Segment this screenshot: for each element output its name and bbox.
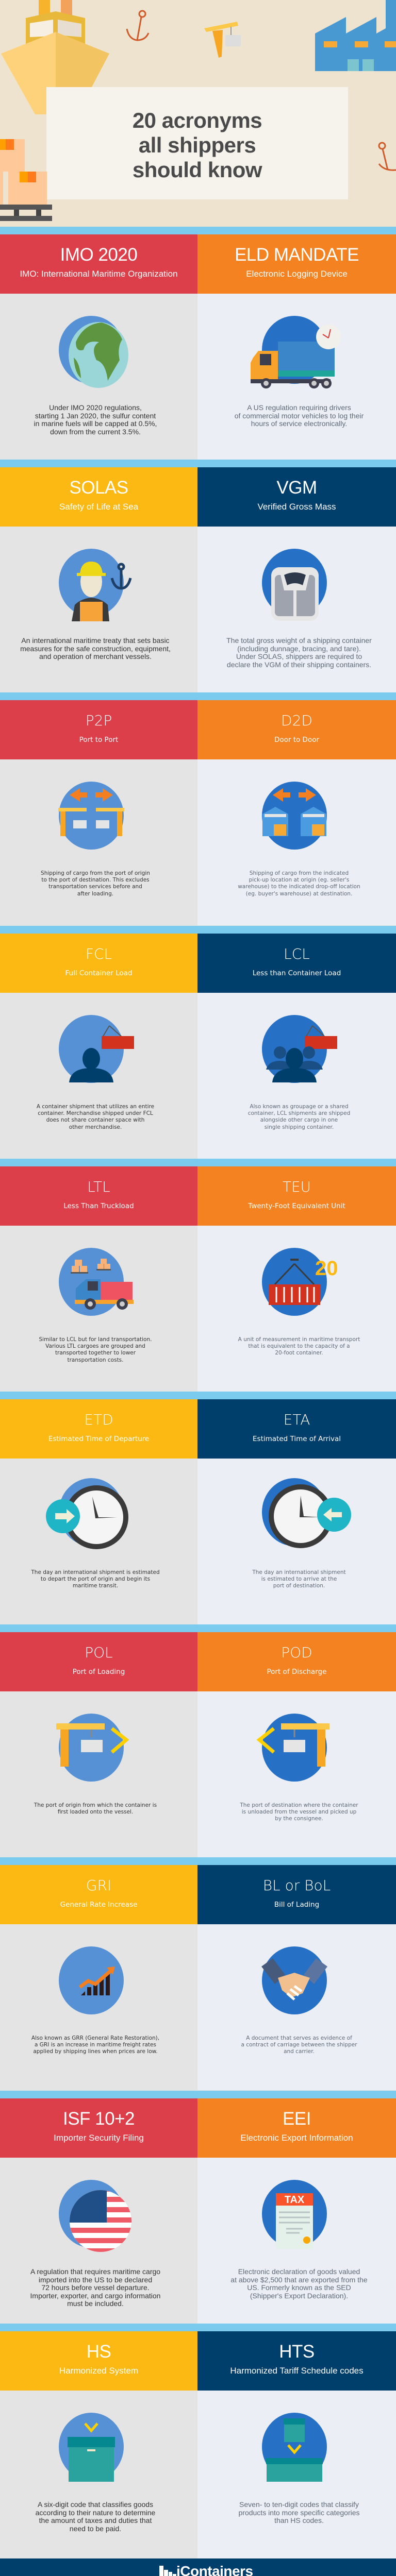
text: ISF description: imported into the US to be declared	[39, 2275, 152, 2283]
header: BL or BoL	[197, 1865, 396, 1924]
text: HTS description: products into more specific categories	[238, 2508, 360, 2516]
icon: people with container	[262, 1015, 337, 1083]
header: LTL: Less Than Truckload	[63, 1202, 134, 1210]
text: ETA description: The day an international shipment	[252, 1569, 346, 1575]
header: POL: POL	[85, 1644, 113, 1661]
text: HS description: according to their nature to determine	[36, 2508, 155, 2516]
row 9: ISF 10+2 / EEI	[0, 2091, 396, 2324]
text: ELD description: of commercial motor vehicles to log their	[235, 411, 364, 419]
header: P2P: Port to Port	[79, 736, 118, 744]
text: TEU description: A unit of measurement in maritime transport	[238, 1336, 360, 1343]
text: POD description: by the consignee.	[275, 1816, 323, 1822]
text: POD description	[240, 1802, 358, 1822]
header: LCL	[197, 934, 396, 993]
header: D2D	[197, 700, 396, 759]
text: ETA description: port of destination.	[273, 1583, 325, 1589]
text: POL description	[34, 1802, 157, 1815]
text: FCL description: other merchandise.	[69, 1124, 122, 1130]
header: POD	[197, 1632, 396, 1691]
hero illustration	[0, 0, 396, 227]
header: HTS: HTS	[279, 2342, 315, 2362]
text: HS description	[15, 2501, 175, 2533]
text: HS description: need to be paid.	[70, 2524, 121, 2533]
text: HS description: the amount of taxes and duties that	[39, 2516, 152, 2524]
header: EEI	[197, 2098, 396, 2158]
header: POD: POD	[281, 1644, 312, 1661]
header: EEI: Electronic Export Information	[240, 2133, 353, 2143]
row 4: FCL / LCL	[0, 926, 396, 1159]
header: ETA	[197, 1399, 396, 1459]
text: TEU description	[238, 1336, 360, 1356]
text: LCL description	[248, 1104, 350, 1130]
icon: tax document: TAX	[285, 2194, 305, 2206]
text: ELD description	[235, 403, 364, 428]
row 3: P2P / D2D	[0, 692, 396, 925]
header: FCL: FCL	[86, 945, 112, 962]
text: D2D description	[238, 870, 360, 897]
header: POL	[0, 1632, 197, 1691]
header: IMO 2020	[0, 234, 197, 294]
panel: ISF	[30, 2180, 160, 2306]
panel: VGM	[197, 527, 396, 692]
icon: person with container	[59, 1015, 134, 1083]
text: D2D description: Shipping of cargo from the indicated	[250, 870, 349, 876]
text: FCL description: container. Merchandise shipped under FCL	[38, 1110, 153, 1116]
header: ETD: Estimated Time of Departure	[48, 1435, 149, 1443]
icon: crane	[204, 22, 241, 58]
text: ISF description	[15, 2268, 175, 2308]
header: SOLAS: Safety of Life at Sea	[59, 502, 138, 512]
header: HTS	[197, 2331, 396, 2391]
header: BL or BoL: Bill of Lading	[274, 1901, 319, 1909]
icon: container with 20: 20	[315, 1257, 338, 1280]
header: P2P: P2P	[86, 712, 112, 729]
text: SOLAS description: measures for the safe construction, equipment,	[20, 644, 171, 652]
text: LTL description: transportation costs.	[67, 1357, 124, 1363]
panel: SOLAS	[0, 527, 197, 692]
header: VGM	[197, 467, 396, 527]
panel: ELD MANDATE	[197, 294, 396, 460]
text: ISF description: Importer, exporter, and cargo information	[30, 2292, 160, 2300]
text: ISF description: A regulation that requires maritime cargo	[30, 2267, 160, 2276]
boxes on pallet	[0, 139, 52, 221]
header: ETA: ETA	[284, 1411, 310, 1428]
text: ETD description: maritime transit.	[73, 1583, 118, 1589]
text: GRI description	[31, 2035, 159, 2055]
text: EEI description: at above $2,500 that are exported from the	[230, 2275, 368, 2283]
header: POL: Port of Loading	[73, 1668, 125, 1676]
panel: ETA	[197, 1459, 396, 1624]
row 6: ETD / ETA	[0, 1392, 396, 1624]
header: FCL	[0, 934, 197, 993]
text: LTL description: transported together to lower	[55, 1350, 136, 1356]
panel: HS	[0, 2391, 197, 2558]
panel: EEI	[197, 2158, 396, 2324]
icon: clock with arrival arrow	[262, 1478, 351, 1548]
text: BL description: A document that serves as evidence of	[246, 2035, 352, 2041]
header: TEU	[197, 1166, 396, 1226]
text: D2D description: (eg. buyer's warehouse) at destination.	[246, 891, 352, 897]
text: FCL description: does not share container space with	[46, 1117, 144, 1123]
header: LCL: Less than Container Load	[253, 969, 341, 977]
text: P2P description: to the port of destination. This excludes	[41, 877, 150, 883]
panel: GRI	[0, 1924, 197, 2090]
panel: D2D	[197, 759, 396, 925]
header: HS: HS	[87, 2342, 111, 2362]
header: SOLAS: SOLAS	[69, 478, 128, 498]
row 8: GRI / BL or BoL	[0, 1857, 396, 2090]
row 7: POL / POD	[0, 1624, 396, 1857]
row 10: HS / HTS	[0, 2324, 396, 2558]
header: HTS: Harmonized Tariff Schedule codes	[230, 2366, 364, 2376]
icon: handshake	[238, 1942, 351, 2019]
icon: anchor	[127, 11, 148, 40]
panel: BL or BoL	[197, 1924, 396, 2090]
row 2: SOLAS / VGM	[0, 460, 396, 692]
panel: FCL	[0, 993, 197, 1159]
icon: clock with departure arrow	[46, 1478, 128, 1549]
text: IMO 2020 description: in marine fuels will be capped at 0.5%,	[34, 419, 157, 428]
text: P2P description: transportation services before and	[48, 884, 142, 890]
text: EEI description: US. Formerly known as the SED	[247, 2283, 351, 2292]
text: VGM description: Under SOLAS, shippers are required to	[236, 652, 362, 660]
text: ETD description: to depart the port of origin and begin its	[41, 1576, 150, 1582]
text: EEI description: Electronic declaration of goods valued	[238, 2267, 360, 2276]
text: EEI description	[219, 2268, 379, 2300]
header: LTL	[0, 1166, 197, 1226]
header: IMO 2020: IMO 2020	[60, 245, 137, 265]
text: LCL description: container, LCL shipments are shipped	[248, 1110, 350, 1116]
header: ETD: ETD	[84, 1411, 113, 1428]
text: ISF description: must be included.	[67, 2299, 124, 2308]
text: EEI description: (Shipper's Export Declaration).	[250, 2292, 348, 2300]
header: VGM: Verified Gross Mass	[257, 502, 336, 512]
text: LTL description: Various LTL cargoes are grouped and	[45, 1343, 145, 1349]
text: GRI description: applied by shipping lines when prices are low.	[33, 2048, 158, 2055]
header: GRI: GRI	[86, 1877, 111, 1894]
icon: anchor right	[379, 143, 396, 170]
text: IMO 2020 description: starting 1 Jan 2020, the sulfur content	[35, 411, 156, 419]
icon: worker with anchor	[59, 549, 132, 621]
panel: TEU	[197, 1226, 396, 1392]
text: LCL description: single shipping container.	[265, 1124, 334, 1130]
text: POD description: The port of destination where the container	[240, 1802, 358, 1808]
panel: ETD	[0, 1459, 197, 1624]
icon: tax document	[238, 2175, 351, 2252]
header: IMO 2020: IMO: International Maritime Organization	[20, 269, 178, 279]
panel: HTS	[197, 2391, 396, 2558]
icon: truck with clock	[251, 316, 341, 388]
header: POD: Port of Discharge	[267, 1668, 326, 1676]
icon: scale	[262, 549, 327, 621]
icon: boxes with chevron	[238, 2408, 351, 2485]
text: P2P description: Shipping of cargo from the port of origin	[41, 870, 150, 876]
icon: factory	[315, 0, 396, 71]
header: ISF 10+2	[0, 2098, 197, 2158]
text: TEU description: 20-foot container.	[275, 1350, 323, 1356]
text: IMO 2020 description	[34, 403, 157, 436]
title box	[46, 87, 348, 199]
text: VGM description: declare the VGM of their shipping containers.	[227, 660, 371, 669]
header: ELD MANDATE: ELD MANDATE	[235, 245, 359, 265]
panel: IMO 2020	[0, 294, 197, 460]
text: SOLAS description: and operation of merchant vessels.	[39, 652, 152, 660]
header: ETA: Estimated Time of Arrival	[253, 1435, 341, 1443]
text: ISF description: 72 hours before vessel departure.	[41, 2283, 150, 2292]
text: GRI description: a GRI is an increase in maritime freight rates	[35, 2042, 156, 2048]
panel: POD	[197, 1691, 396, 1857]
header: ISF 10+2: ISF 10+2	[63, 2109, 135, 2129]
text: ETA description: is estimated to arrive at the	[261, 1576, 337, 1582]
text: VGM description	[226, 636, 372, 669]
text: ELD description: hours of service electronically.	[251, 419, 347, 428]
text: HS description: A six-digit code that classifies goods	[38, 2500, 153, 2509]
icon: US flag	[59, 2180, 131, 2252]
icon: ship	[1, 0, 109, 114]
header: GRI: General Rate Increase	[60, 1901, 137, 1909]
text: HTS description: Seven- to ten-digit codes that classify	[239, 2500, 359, 2509]
title: should know	[133, 158, 262, 182]
header: EEI: EEI	[283, 2109, 311, 2129]
text: ELD description: A US regulation requiring drivers	[247, 403, 351, 412]
text: SOLAS description: An international maritime treaty that sets basic	[21, 636, 170, 645]
text: SOLAS description	[20, 636, 171, 660]
icon: truck with boxes	[59, 1248, 134, 1316]
text: VGM description: The total gross weight of a shipping container	[226, 636, 372, 645]
text: LCL description: alongside other cargo in one	[260, 1117, 338, 1123]
footer: iContainers logo	[0, 2558, 396, 2576]
text: GRI description: Also known as GRR (General Rate Restoration),	[31, 2035, 159, 2041]
header: D2D: D2D	[281, 712, 312, 729]
icon: warehouses with arrows	[262, 782, 327, 850]
header: BL or BoL: BL or BoL	[263, 1877, 331, 1894]
text: FCL description	[37, 1104, 154, 1130]
header: ETD	[0, 1399, 197, 1459]
header: LCL: LCL	[284, 945, 310, 962]
header: HS	[0, 2331, 197, 2391]
text: BL description: a contract of carriage between the shipper	[241, 2042, 357, 2048]
header: ELD MANDATE	[197, 234, 396, 294]
text: BL description: and carrier.	[284, 2048, 315, 2055]
text: LTL description	[39, 1336, 152, 1363]
panel: P2P	[0, 759, 197, 925]
header: P2P	[0, 700, 197, 759]
text: IMO 2020 description: Under IMO 2020 regulations,	[49, 403, 142, 412]
text: ETD description	[31, 1569, 160, 1589]
text: D2D description: warehouse) to the indicated drop-off location	[238, 884, 360, 890]
title: all shippers	[139, 133, 256, 157]
text: D2D description: pick-up location at origin (eg. seller's	[249, 877, 349, 883]
panel: LTL	[0, 1226, 197, 1392]
header: GRI	[0, 1865, 197, 1924]
icon: crane discharging	[257, 1714, 329, 1782]
icon: globe	[59, 316, 128, 388]
header: VGM: VGM	[276, 478, 317, 498]
text: VGM description: (including dunnage, bracing, and tare).	[237, 644, 361, 652]
header: TEU: TEU	[283, 1178, 311, 1195]
icon: crane loading	[56, 1714, 129, 1782]
header: TEU: Twenty-Foot Equivalent Unit	[248, 1202, 345, 1210]
text: LCL description: Also known as groupage or a shared	[250, 1104, 349, 1110]
icon: container with 20	[262, 1248, 338, 1316]
header: SOLAS	[0, 467, 197, 527]
text: ETD description: The day an international shipment is estimated	[31, 1569, 160, 1575]
title	[133, 108, 262, 182]
header: ELD MANDATE: Electronic Logging Device	[246, 269, 348, 279]
text: FCL description: A container shipment that utilizes an entire	[37, 1104, 154, 1110]
text: ETA description	[252, 1569, 346, 1589]
text: TEU description: that is equivalent to the capacity of a	[248, 1343, 350, 1349]
icon: box with chevron	[35, 2408, 148, 2485]
text: POL description: first loaded onto the vessel.	[58, 1809, 133, 1815]
panel: POL	[0, 1691, 197, 1857]
text: P2P description	[41, 870, 150, 897]
icon: cranes with arrows	[58, 782, 124, 850]
text: BL description	[219, 2035, 379, 2056]
text: LTL description: Similar to LCL but for land transportation.	[39, 1336, 152, 1343]
icon: rising chart	[59, 1946, 124, 2014]
header: ISF 10+2: Importer Security Filing	[54, 2133, 144, 2143]
text: POD description: is unloaded from the vessel and picked up	[242, 1809, 356, 1815]
row 5: LTL / TEU	[0, 1159, 396, 1392]
text: P2P description: after loading.	[77, 891, 113, 897]
text: IMO 2020 description: down from the current 3.5%.	[50, 428, 141, 436]
text: POL description: The port of origin from which the container is	[34, 1802, 157, 1808]
header: D2D: Door to Door	[274, 736, 319, 744]
text: HTS description: than HS codes.	[274, 2516, 324, 2524]
header: LTL: LTL	[87, 1178, 110, 1195]
header: FCL: Full Container Load	[65, 969, 133, 977]
row 1: IMO 2020 / ELD MANDATE	[0, 227, 396, 460]
header: HS: Harmonized System	[59, 2366, 138, 2376]
panel: LCL	[197, 993, 396, 1159]
title: 20 acronyms	[133, 108, 262, 132]
text: HTS description	[219, 2501, 379, 2524]
